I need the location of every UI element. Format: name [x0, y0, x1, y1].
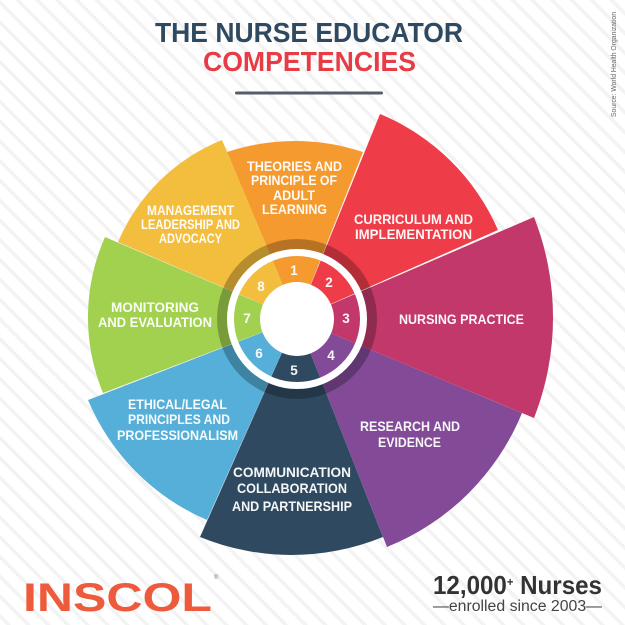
segment 1: theories and principle of adult learning: PRINCIPLE OF	[251, 173, 337, 188]
segment 4: research and evidence: EVIDENCE	[378, 435, 441, 450]
segment numbers: 4	[327, 348, 335, 363]
hub shadow ring	[222, 244, 372, 394]
title divider	[235, 92, 383, 94]
hub white ring	[230, 252, 364, 386]
segment numbers	[243, 263, 350, 378]
title: COMPETENCIES	[203, 46, 416, 77]
segment numbers: 5	[290, 363, 298, 378]
enrolment stat	[433, 570, 603, 615]
segment numbers: 8	[257, 279, 265, 294]
segment 1: theories and principle of adult learning: THEORIES AND	[247, 159, 342, 174]
title: THE NURSE EDUCATOR	[155, 17, 463, 48]
segment numbers: 2	[325, 275, 333, 290]
segment 7: monitoring and evaluation: MONITORING	[111, 300, 199, 315]
segment 1: theories and principle of adult learning: ADULT	[273, 188, 316, 203]
segment 5: communication collaboration and partnership: COMMUNICATION	[233, 465, 351, 480]
segment 3: nursing practice: NURSING PRACTICE	[399, 312, 524, 327]
segment 2: curriculum and implementation	[297, 114, 498, 319]
segment 8: management leadership and advocacy	[118, 140, 297, 319]
segment 5: communication collaboration and partnership: COLLABORATION	[237, 481, 347, 496]
segment numbers: 1	[290, 263, 298, 278]
segment 6: ethical legal principles and professionalism	[88, 319, 297, 520]
segment 7: monitoring and evaluation: AND EVALUATION	[98, 315, 212, 330]
competency wheel	[88, 114, 553, 555]
enrolment stat: Nurses	[513, 570, 602, 600]
segment numbers: 6	[255, 346, 263, 361]
segment 6: ethical legal principles and professionalism: ETHICAL/LEGAL	[128, 397, 227, 412]
segment numbers: 3	[342, 311, 350, 326]
enrolment stat: —enrolled since 2003—	[433, 598, 603, 615]
source note: Source: World Health Organization	[609, 12, 618, 117]
segment 1: theories and principle of adult learning	[227, 141, 363, 319]
segment numbers: 7	[243, 311, 251, 326]
segment 2: curriculum and implementation: IMPLEMENTATION	[355, 227, 472, 242]
segment 3: nursing practice	[297, 217, 553, 418]
segment 7: monitoring and evaluation	[88, 237, 297, 393]
hub centre	[260, 282, 334, 356]
segment 6: ethical legal principles and professionalism: PRINCIPLES AND	[128, 412, 230, 427]
enrolment stat: 12,000	[433, 570, 513, 600]
segment 8: management leadership and advocacy: ADVOCACY	[159, 231, 222, 246]
segment 8: management leadership and advocacy: MANAGEMENT	[147, 203, 235, 218]
segment 4: research and evidence	[297, 319, 522, 547]
INSCOL logo: INSCOL	[23, 576, 212, 620]
enrolment stat: +	[507, 575, 513, 589]
segment 2: curriculum and implementation: CURRICULUM AND	[354, 212, 473, 227]
title	[155, 17, 463, 77]
segment 5: communication collaboration and partnership: AND PARTNERSHIP	[232, 499, 352, 514]
segment 5: communication collaboration and partnership	[200, 319, 383, 555]
segment 6: ethical legal principles and professionalism: PROFESSIONALISM	[117, 428, 238, 443]
segment 8: management leadership and advocacy: LEADERSHIP AND	[141, 217, 240, 232]
INSCOL logo: ®	[214, 574, 219, 581]
segment 4: research and evidence: RESEARCH AND	[360, 419, 460, 434]
segment 1: theories and principle of adult learning: LEARNING	[262, 202, 327, 217]
